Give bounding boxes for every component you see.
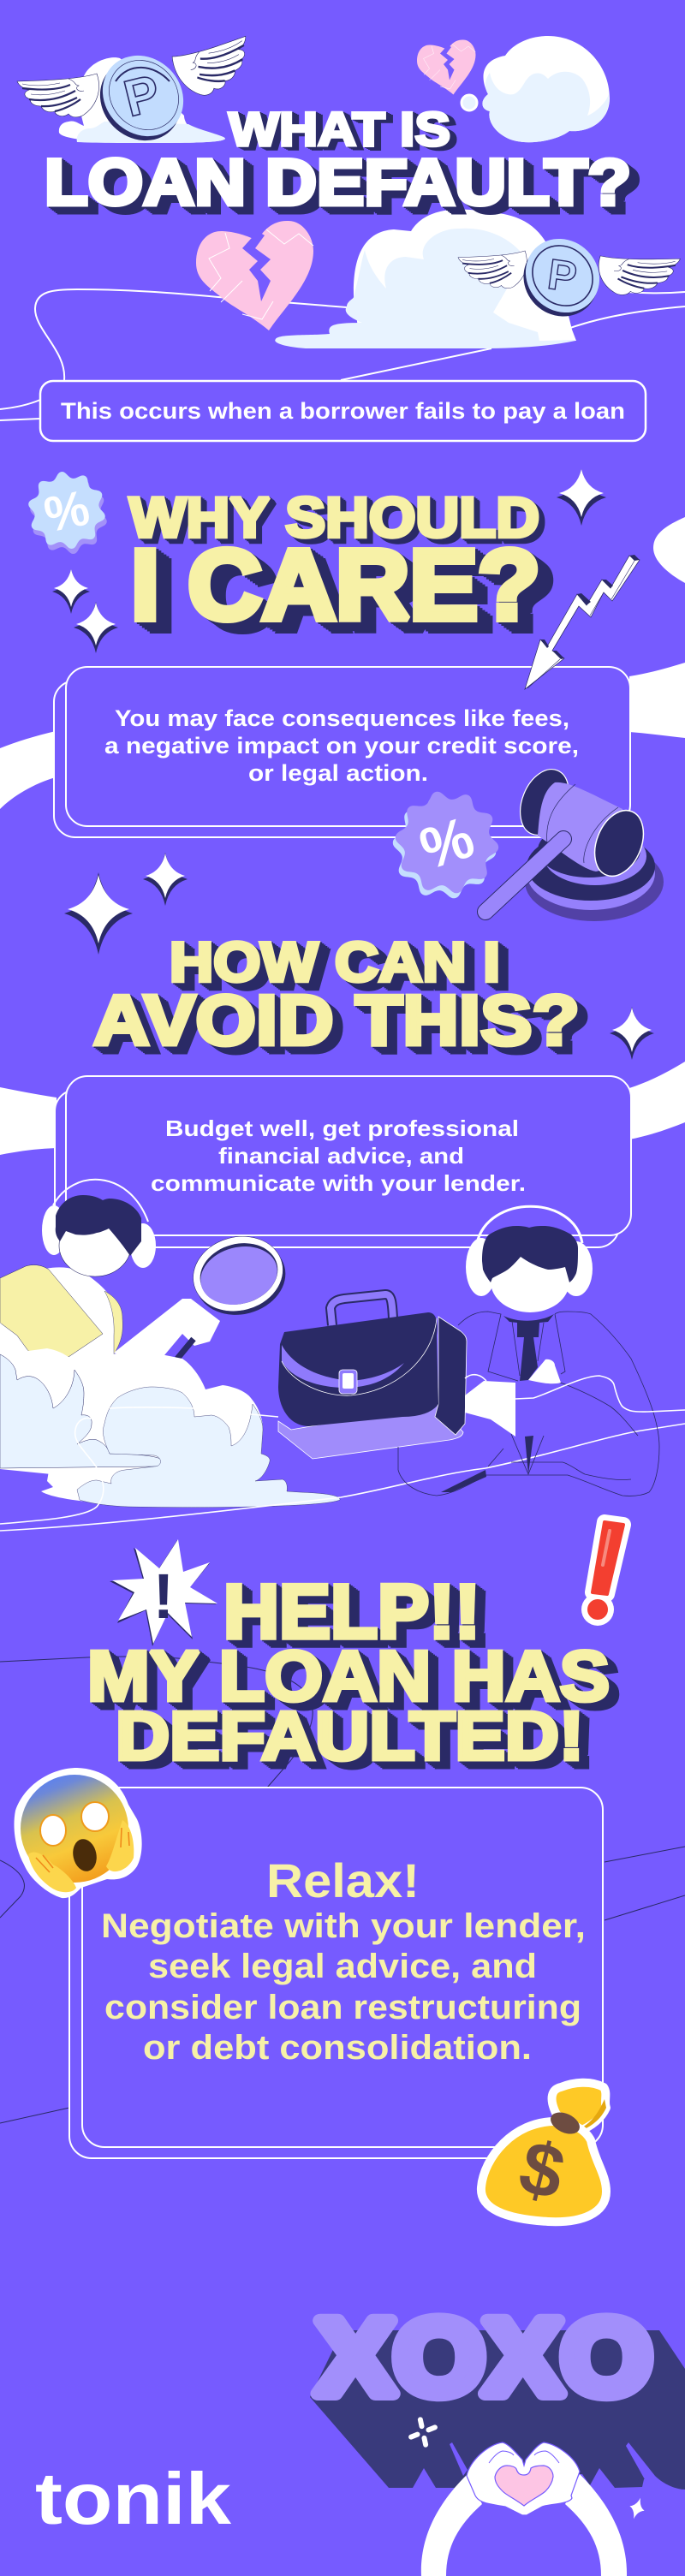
- panel: advice card: financial advice, and: [218, 1143, 464, 1169]
- heading: help my loan has defaulted: [87, 1568, 610, 1774]
- icon: thought bubble: [462, 95, 477, 110]
- title: WHAT IS: [229, 102, 450, 156]
- icon: percent badge lilac: [388, 788, 503, 902]
- panel: consequences card: a negative impact on your credit score,: [104, 733, 579, 759]
- icon: hands making heart: [421, 2442, 627, 2576]
- icon: big cloud with flying coin: [275, 209, 682, 348]
- icon: small sparkles bottom: [408, 2417, 648, 2521]
- section 4 thin lines: [0, 1657, 685, 2123]
- heading: why should i care: I CARE?: [131, 529, 540, 640]
- icon: flying coin with cloud, top left: P: [118, 63, 165, 128]
- heading: help my loan has defaulted: MY LOAN HAS: [87, 1636, 610, 1716]
- icon: big broken heart: [196, 221, 313, 330]
- panel: relax card: Relax!: [266, 1853, 420, 1907]
- icon: percent badge lilac: %: [413, 805, 481, 882]
- panel: relax card: Negotiate with your lender,: [101, 1907, 586, 1945]
- heading: help my loan has defaulted: DEFAULTED!: [116, 1698, 584, 1774]
- icon: screaming emoji: [14, 1768, 142, 1898]
- icon: flying coin with cloud, top left: [17, 28, 260, 157]
- panel: consequences card: You may face consequences like fees,: [115, 705, 569, 731]
- icon: lightning bolt arrow: [525, 555, 640, 689]
- heading: help my loan has defaulted: HELP!!: [223, 1568, 480, 1654]
- icon: small broken heart: [417, 39, 476, 94]
- section 1 connecting lines: [0, 289, 685, 420]
- illustration: person with magnifier: [0, 1180, 294, 1378]
- icon: top right cloud: [482, 36, 610, 142]
- title: [45, 102, 631, 219]
- heading: how can i avoid this: [93, 931, 580, 1060]
- panel: advice card: Budget well, get professional: [165, 1115, 519, 1141]
- panel: consequences card: [54, 667, 630, 837]
- heading: how can i avoid this: HOW CAN I: [170, 931, 500, 993]
- icon: sparkles section 2: [52, 469, 606, 653]
- icon: starburst with exclamation: [110, 1539, 217, 1646]
- icon: big cloud with flying coin: P: [545, 250, 580, 301]
- heading: how can i avoid this: AVOID THIS?: [93, 980, 580, 1060]
- icon: money bag: $: [511, 2124, 573, 2216]
- panel: relax card: seek legal advice, and: [148, 1948, 537, 1985]
- panel: relax card: or debt consolidation.: [143, 2029, 532, 2067]
- icon: gavel: [485, 762, 664, 921]
- icon: percent badge light blue: %: [39, 479, 94, 544]
- panel: relax card: [69, 1788, 603, 2158]
- icon: starburst with exclamation: !: [153, 1561, 174, 1632]
- shadow of xoxo: [310, 2330, 685, 2490]
- logo: tonik: tonik: [35, 2459, 232, 2540]
- panel: definition pill: This occurs when a borrower fails to pay a loan: [61, 398, 625, 424]
- xoxo lettering: XOXO: [317, 2299, 652, 2417]
- illustration: briefcase: [278, 1294, 467, 1459]
- illustration: left clouds: [0, 1323, 340, 1508]
- title: LOAN DEFAULT?: [45, 146, 631, 219]
- panel: consequences card: or legal action.: [248, 760, 428, 786]
- panel: definition pill: [40, 381, 646, 441]
- heading: why should i care: [129, 485, 540, 640]
- panel: relax card: consider loan restructuring: [104, 1989, 581, 2026]
- section 3 connecting lines: [0, 1407, 685, 1531]
- illustration: person in suit: [398, 1206, 685, 1496]
- panel: advice card: communicate with your lender.: [151, 1170, 526, 1196]
- icon: sparkles section 3: [64, 853, 654, 1060]
- icon: money bag: [481, 2083, 606, 2222]
- icon: red exclamation: [581, 1522, 623, 1626]
- background white wave shapes: [0, 517, 685, 1155]
- icon: percent badge light blue: [22, 467, 113, 559]
- panel: advice card: [55, 1076, 631, 1247]
- heading: why should i care: WHY SHOULD: [129, 485, 539, 549]
